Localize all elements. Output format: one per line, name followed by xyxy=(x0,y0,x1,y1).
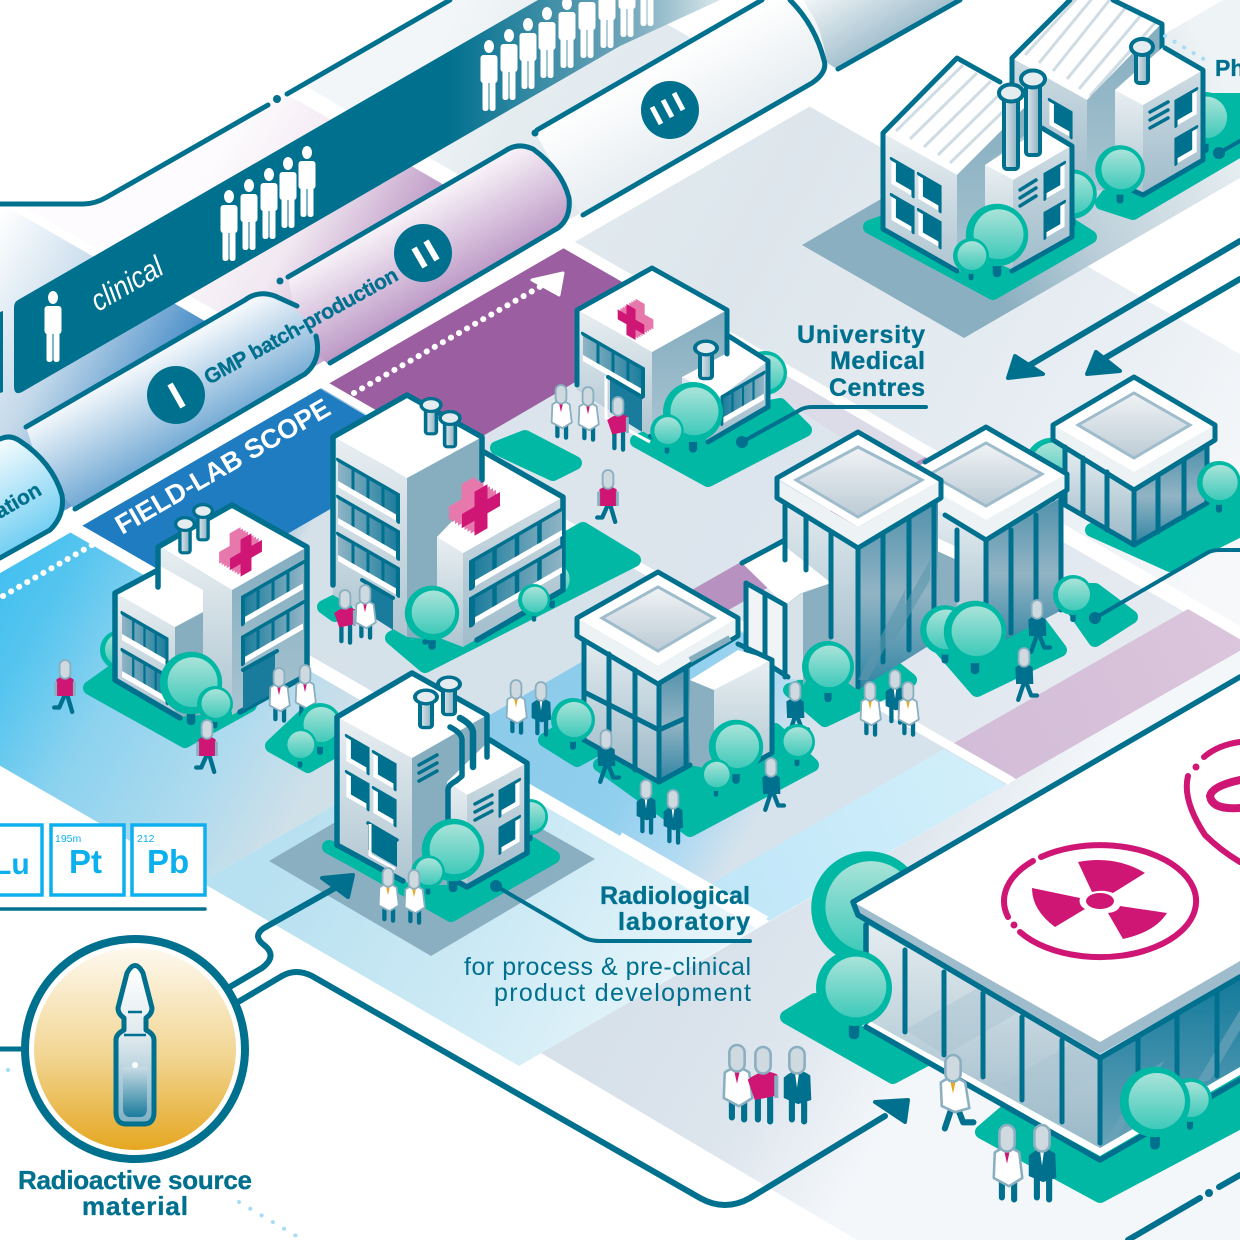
badge: II xyxy=(394,224,452,282)
glass building 4 xyxy=(1025,377,1215,545)
ground: pale blue patch xyxy=(707,749,1006,921)
tree: lab front left xyxy=(816,950,892,1039)
tile: Pt xyxy=(51,825,124,895)
icon: single patient xyxy=(44,291,62,362)
ground: white separators xyxy=(0,0,1011,920)
badge: III xyxy=(641,81,699,139)
people: lab doctors xyxy=(379,868,425,923)
ground: pale purple band xyxy=(954,609,1240,779)
main flow line to grey plane xyxy=(238,972,908,1205)
glass building 3 xyxy=(905,427,1067,650)
ground: faint purple streak xyxy=(760,372,925,472)
bottom right line xyxy=(1128,1175,1240,1240)
tree: behind main lab roof xyxy=(811,851,925,985)
people: front pair xyxy=(994,1125,1056,1199)
ground: factory site shadow xyxy=(802,0,1240,338)
arrow: dotted on purple xyxy=(354,273,563,393)
ground: white mask above top outline xyxy=(0,0,455,204)
pipe I xyxy=(26,294,318,510)
label: radiological laboratory xyxy=(600,882,750,936)
icon: second hazard symbol xyxy=(1187,742,1240,862)
dotted on cyan xyxy=(3,545,92,596)
trees: small pair xyxy=(283,703,342,768)
people: group by tall building xyxy=(786,670,919,735)
leader: university medical centres xyxy=(736,407,926,448)
glass building 1 xyxy=(577,572,772,782)
shadow: lab xyxy=(269,766,595,956)
ground: grey strip xyxy=(0,0,1240,626)
badge: I xyxy=(147,366,205,424)
trees: building 3 xyxy=(920,575,1093,674)
green base: factory 2 xyxy=(1102,100,1240,213)
people: large hospital xyxy=(334,585,376,643)
label: radiological laboratory: Radiological xyxy=(600,882,750,910)
person: walking doctor xyxy=(941,1055,973,1128)
person: walking lower xyxy=(196,720,216,772)
icon: ampoule xyxy=(116,966,154,1124)
pipe II xyxy=(276,146,569,364)
radiological laboratory site xyxy=(269,673,595,956)
text: process note: product development xyxy=(494,979,751,1007)
ground: cyan strip xyxy=(0,486,438,882)
glass building 2 with annex xyxy=(742,432,941,690)
tile: Pb: Pb xyxy=(147,843,189,880)
label: radioactive source material: material xyxy=(82,1191,188,1221)
text: process note xyxy=(464,953,751,1007)
ground: purple mid band xyxy=(690,457,960,612)
pipe: start stub xyxy=(0,437,63,562)
label: clinical: clinical xyxy=(85,250,170,318)
tile: Pt: 195m xyxy=(55,833,82,845)
ground: blue patch xyxy=(450,601,944,886)
people: suit walking xyxy=(1028,600,1050,652)
label: university medical centres: Centres xyxy=(829,374,925,402)
ground: white area above factories xyxy=(580,0,1240,354)
leader: right group xyxy=(1089,550,1240,624)
ground: lower grey plane xyxy=(541,650,1240,1240)
pipe III xyxy=(532,0,825,216)
element tiles xyxy=(0,825,205,909)
arrow: left pointing B xyxy=(1087,279,1240,374)
icon: red cross xyxy=(449,470,500,543)
green bases: central xyxy=(90,405,1240,830)
ground: pale cyan strip xyxy=(201,745,756,1066)
tree: factory big xyxy=(966,204,1028,277)
trees: building 1 xyxy=(551,698,815,797)
main laboratory building xyxy=(853,677,1240,1160)
factory front xyxy=(883,58,1072,273)
dot: left xyxy=(6,1068,10,1072)
people: doctors pair xyxy=(270,665,316,721)
ground: field-lab blue quad xyxy=(76,385,429,589)
green base: lab xyxy=(329,840,553,915)
radioactive source circle xyxy=(25,939,245,1159)
label: university medical centres xyxy=(797,321,925,402)
label: university medical centres: University xyxy=(797,321,925,349)
tile: Pt: Pt xyxy=(69,843,102,880)
ground: blue strip xyxy=(0,197,1007,920)
dots: to pharma label xyxy=(1165,36,1212,64)
icon: small patient group xyxy=(220,146,316,261)
green base: lab right xyxy=(982,1050,1240,1196)
tree: factory middle xyxy=(1095,145,1145,203)
tree: building 2 xyxy=(802,641,854,702)
green base: factory 1 xyxy=(870,180,1090,293)
hospital: large xyxy=(333,395,573,650)
top outline xyxy=(0,0,450,204)
text: process note: for process & pre-clinical xyxy=(464,953,751,981)
tree: behind factory 1 xyxy=(1047,169,1097,227)
tree: lab front right back xyxy=(1168,1078,1212,1130)
label: field-lab scope: FIELD-LAB SCOPE xyxy=(110,393,335,540)
tree: building 4 xyxy=(1197,461,1240,513)
leader: radiological laboratory xyxy=(490,880,750,941)
tree: lab front right xyxy=(1120,1067,1190,1150)
tree: lab small xyxy=(411,855,445,895)
ground: purple strip xyxy=(0,0,1240,779)
icon: red cross xyxy=(219,521,262,583)
icon: radiation symbol xyxy=(1004,845,1196,957)
people: building 1 xyxy=(507,680,784,843)
hospital: university medical centre xyxy=(577,268,787,454)
tree: lab big xyxy=(422,819,484,892)
tile: Pb xyxy=(132,825,205,895)
hospital: lower left xyxy=(100,505,307,728)
input line xyxy=(0,1046,24,1052)
tile: Lu xyxy=(0,825,42,895)
arrow: left pointing A xyxy=(1008,241,1240,378)
label: university medical centres: Medical xyxy=(830,347,925,375)
green base: lab left xyxy=(787,1000,925,1077)
dots: bottom xyxy=(239,1202,298,1237)
arrow: to radiological lab xyxy=(228,875,353,988)
people: trio xyxy=(724,1045,811,1121)
icon: large patient group xyxy=(480,0,656,111)
label: radioactive source material xyxy=(18,1165,252,1221)
label: radioactive source material: Radioactive source xyxy=(18,1165,252,1195)
leader: factory xyxy=(1219,141,1240,153)
pipe IV xyxy=(790,0,975,70)
person: walking xyxy=(597,470,617,522)
tree: factory small xyxy=(953,238,989,280)
clinical band xyxy=(0,0,720,393)
icon: red cross xyxy=(618,294,653,345)
factory back xyxy=(1012,0,1231,195)
factory site xyxy=(870,0,1240,293)
person: walking left xyxy=(54,660,74,712)
ground: purple quad xyxy=(322,244,685,454)
label: radiological laboratory: laboratory xyxy=(618,908,750,936)
label: GMP batch-production: GMP batch-production xyxy=(200,264,402,389)
tile: Pb: 212 xyxy=(137,833,155,845)
people: suit walking lower xyxy=(1015,648,1037,700)
people: hospital entrance xyxy=(552,385,628,450)
